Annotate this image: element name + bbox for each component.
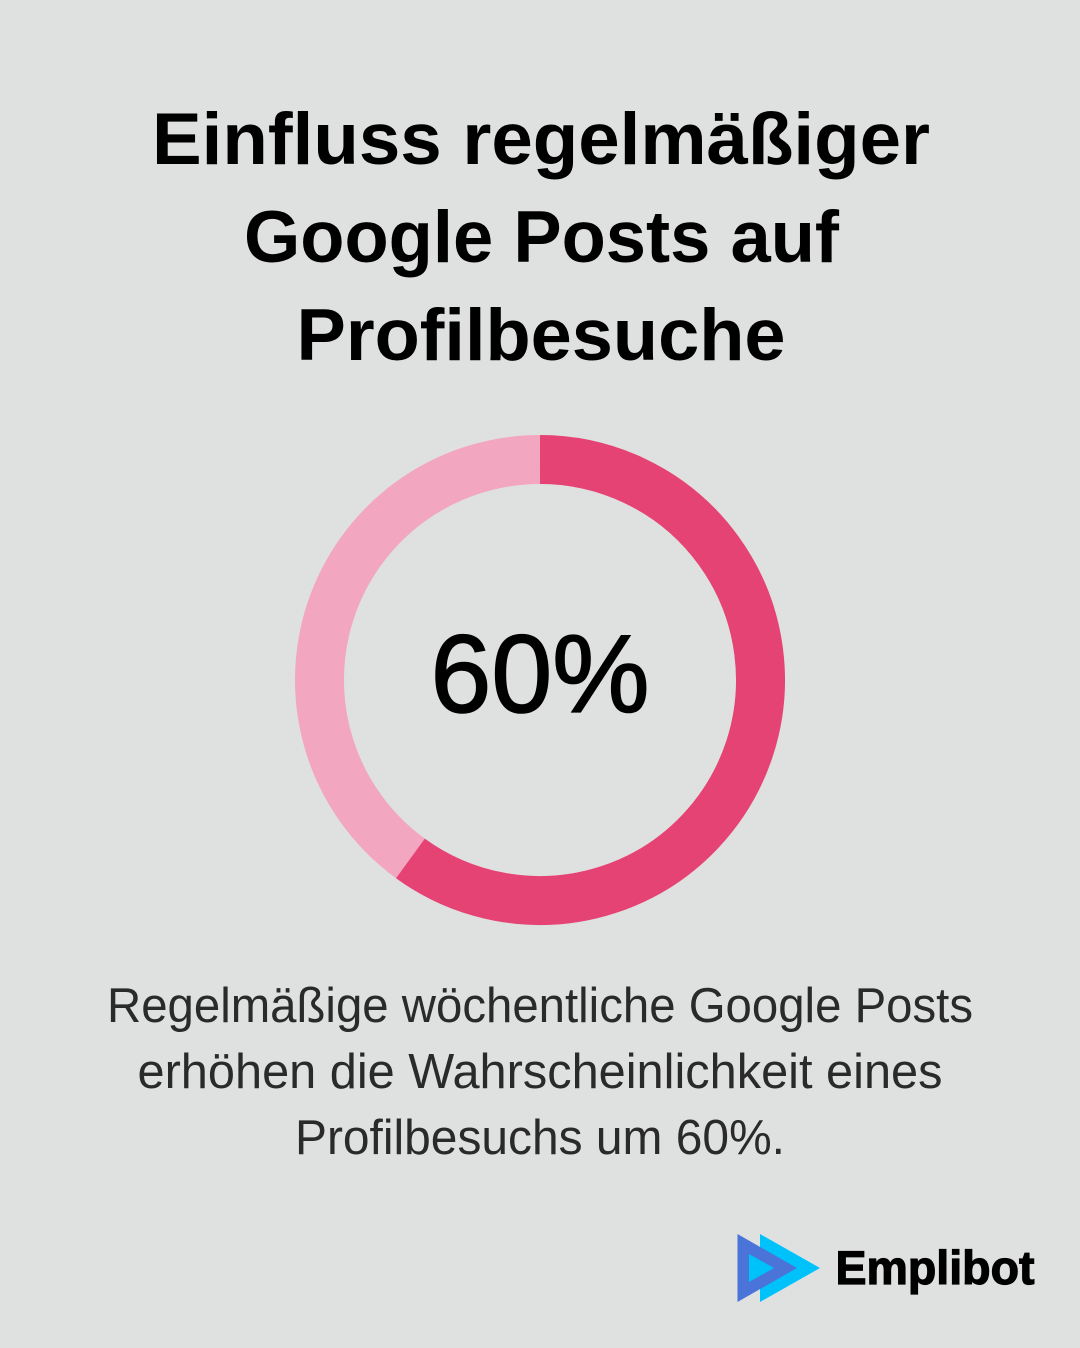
description text: [107, 979, 973, 1165]
logo wordmark: Emplibot: [836, 1241, 1035, 1294]
description text: erhöhen die Wahrscheinlichkeit eines: [138, 1045, 942, 1099]
title: Profilbesuche: [296, 295, 786, 376]
ring value: [410, 460, 760, 900]
logo: Emplibot: [738, 1234, 1035, 1302]
ring remainder: [319, 459, 540, 858]
center value: 60%: [430, 613, 650, 736]
donut chart: 60%: [319, 459, 760, 900]
description text: Profilbesuchs um 60%.: [295, 1111, 785, 1165]
icon: play triangles: [738, 1234, 820, 1302]
description text: Regelmäßige wöchentliche Google Posts: [107, 979, 973, 1033]
title: [152, 99, 930, 376]
title: Google Posts auf: [244, 197, 840, 278]
title: Einfluss regelmäßiger: [152, 99, 930, 180]
